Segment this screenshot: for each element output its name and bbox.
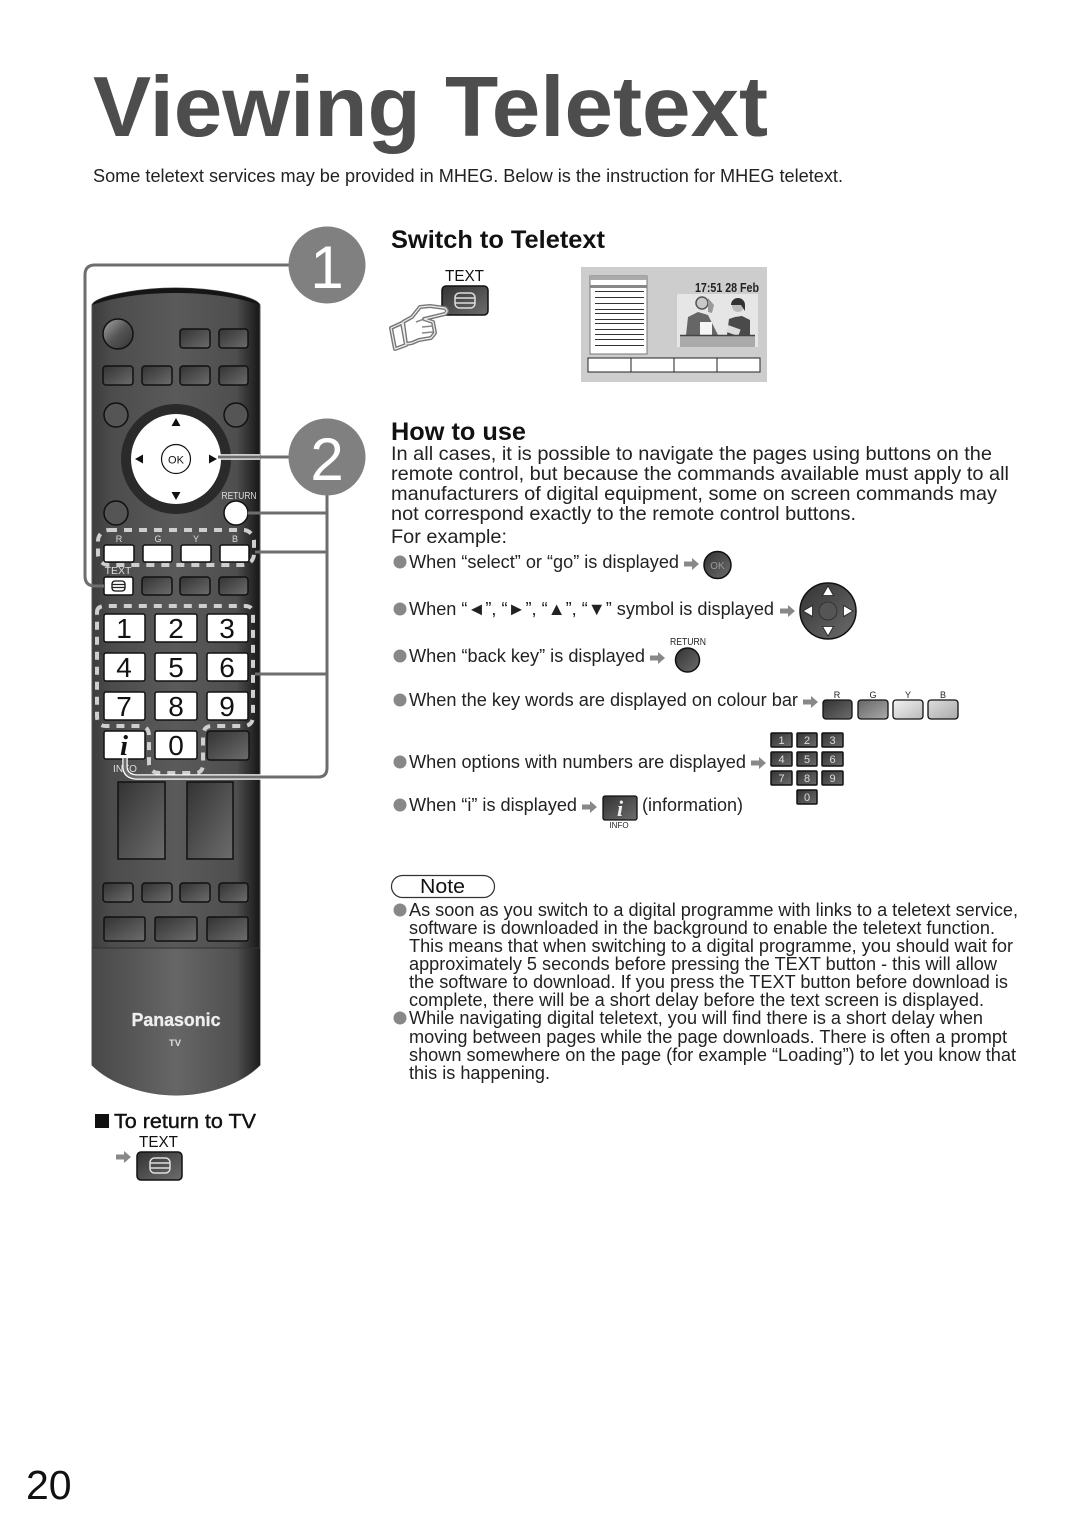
example: numbers: 9 [829, 773, 836, 785]
example: numbers: 0 [804, 792, 810, 804]
news photo [677, 294, 758, 347]
colour buttons [104, 534, 249, 562]
number buttons: 7 [116, 691, 132, 722]
example: numbers: 4 [778, 754, 785, 766]
example: numbers: 3 [829, 735, 836, 747]
example: information: i [617, 796, 624, 821]
example: numbers: 2 [804, 735, 810, 747]
note 1: complete, there will be a short delay before the text screen is displayed. [409, 990, 984, 1010]
example: numbers: 6 [829, 754, 836, 766]
to return to tv: TEXT [139, 1134, 178, 1151]
how to use paragraph: manufacturers of digital equipment, some on screen commands may [391, 483, 997, 505]
number buttons: 6 [219, 652, 235, 683]
colour buttons: B [232, 534, 238, 544]
number buttons: 5 [168, 652, 184, 683]
connectors from step 2 to buttons [125, 457, 327, 777]
example: numbers: 1 [778, 735, 785, 747]
step 1 badge [288, 226, 366, 304]
colour buttons: R [116, 534, 123, 544]
colour buttons: Y [193, 534, 199, 544]
number buttons: 9 [219, 691, 235, 722]
note 1 [394, 900, 1018, 1010]
example: colour bar: Y [905, 690, 911, 700]
step 2 badge [288, 418, 366, 496]
dashed highlight: number buttons [97, 606, 253, 773]
remote control [92, 288, 260, 1095]
to return to tv [95, 1111, 257, 1180]
example: colour bar: When the key words are displayed on colour bar [409, 690, 798, 710]
example: arrow symbols: When “◄”, “►”, “▲”, “▼” symbol is displayed [409, 599, 774, 619]
number buttons: 2 [168, 613, 184, 644]
text button [104, 565, 248, 595]
text button with pointing hand [391, 268, 488, 349]
to return to tv: To return to TV [114, 1111, 257, 1133]
example: information: When “i” is displayed [409, 795, 577, 815]
note 2: this is happening. [409, 1063, 550, 1083]
example: colour bar: B [940, 690, 946, 700]
example: colour bar: R [834, 690, 841, 700]
note 1: approximately 5 seconds before pressing the TEXT button - this will allow [409, 954, 998, 974]
example: numbers: When options with numbers are displayed [409, 752, 746, 772]
example: information: (information) [642, 795, 743, 815]
for example label: For example: [391, 526, 507, 548]
directional pad: OK [168, 454, 185, 466]
example: select or go: When “select” or “go” is displayed [409, 552, 679, 572]
example: colour bar: G [869, 690, 877, 700]
step 2 badge: 2 [310, 426, 344, 493]
example: numbers: 5 [804, 754, 810, 766]
note badge: Note [420, 876, 465, 898]
example: arrow symbols [394, 583, 856, 639]
number buttons: 1 [116, 613, 132, 644]
example: colour bar [394, 690, 958, 719]
colour buttons: G [154, 534, 162, 544]
connector from step 1 to text button [85, 265, 292, 586]
note 1: As soon as you switch to a digital programme with links to a teletext service, [409, 900, 1018, 920]
note 1: This means that when switching to a digital programme, you should wait for [409, 936, 1013, 956]
brand logo: Panasonic [132, 1010, 220, 1030]
teletext screen illustration [581, 267, 767, 382]
info button [104, 730, 145, 775]
icon: pointing hand [391, 306, 447, 349]
top buttons [103, 319, 248, 525]
example: back key [394, 637, 706, 672]
clock text: 17:51 28 Feb [695, 281, 759, 295]
dashed highlight: colour buttons [98, 530, 254, 565]
how to use paragraph: not correspond exactly to the remote control buttons. [391, 503, 856, 525]
lower buttons [103, 883, 248, 941]
page number: 20 [26, 1462, 72, 1508]
title: Viewing Teletext [93, 60, 768, 155]
example: back key: RETURN [670, 637, 706, 648]
intro text: Some teletext services may be provided in MHEG. Below is the instruction for MHEG teletext. [93, 166, 843, 186]
tall buttons [118, 782, 233, 859]
note 2: While navigating digital teletext, you will find there is a short delay when [409, 1008, 983, 1028]
how to use paragraph: In all cases, it is possible to navigate the pages using buttons on the [391, 443, 992, 465]
example: numbers: 8 [804, 773, 810, 785]
return button: RETURN [222, 491, 256, 502]
example: information: INFO [609, 821, 629, 830]
note 2: moving between pages while the page downloads. There is often a prompt [409, 1027, 1007, 1047]
number buttons: 4 [116, 652, 132, 683]
text button with pointing hand: TEXT [445, 268, 484, 285]
example: select or go: OK [710, 561, 725, 572]
TV label: TV [169, 1038, 182, 1049]
number buttons: 3 [219, 613, 235, 644]
step 1 badge: 1 [310, 234, 344, 301]
note 1: the software to download. If you press the TEXT button before download is [409, 972, 1008, 992]
note badge [392, 876, 494, 898]
how to use paragraph [391, 443, 1009, 525]
number buttons [104, 613, 248, 761]
example: information [394, 795, 743, 830]
text button: TEXT [105, 565, 132, 577]
note 2: shown somewhere on the page (for example “Loading”) to let you know that [409, 1045, 1016, 1065]
number buttons: 0 [168, 730, 184, 761]
directional pad [121, 404, 231, 514]
example: numbers: 7 [778, 773, 785, 785]
info button: i [120, 730, 128, 762]
heading: switch to teletext: Switch to Teletext [391, 226, 606, 254]
return button [222, 491, 256, 525]
example: back key: When “back key” is displayed [409, 646, 645, 666]
info button: INFO [113, 764, 137, 775]
example: select or go [394, 552, 731, 578]
number buttons: 8 [168, 691, 184, 722]
note 1: software is downloaded in the background to enable the teletext function. [409, 918, 995, 938]
how to use paragraph: remote control, but because the commands available must apply to all [391, 463, 1009, 485]
heading: how to use: How to use [391, 418, 526, 446]
note 2 [394, 1008, 1016, 1083]
example: numbers [394, 733, 843, 804]
